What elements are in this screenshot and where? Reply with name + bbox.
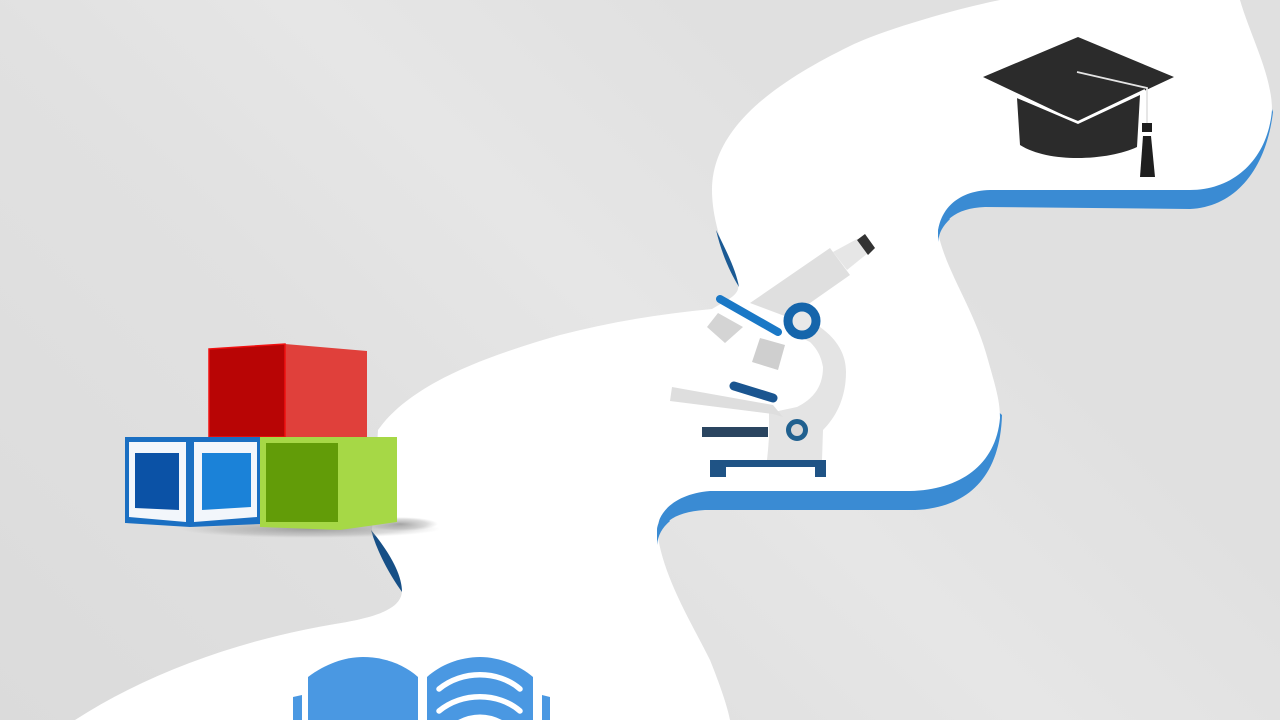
dark specimen slide	[734, 386, 773, 398]
book covers	[293, 695, 550, 720]
cap body	[1017, 95, 1140, 158]
small focus ring	[788, 422, 806, 438]
tassel	[1140, 123, 1155, 177]
blue band tip: lower	[657, 516, 670, 545]
block shadow	[180, 517, 440, 538]
sliver: upper dark blue edge	[716, 230, 739, 287]
blue block	[125, 437, 261, 527]
book right page	[427, 657, 533, 720]
red block	[209, 344, 367, 437]
green block	[260, 437, 397, 530]
book lines	[439, 675, 520, 720]
icon: open book	[293, 657, 550, 720]
book left page	[308, 657, 418, 720]
microscope arm	[767, 327, 846, 460]
objective lens right	[752, 338, 785, 370]
tassel cord	[1077, 72, 1147, 123]
blue focus ring	[788, 307, 816, 335]
microscope tube	[750, 248, 850, 318]
blue band tip: upper	[938, 216, 950, 242]
blue slide bar	[720, 299, 778, 332]
blue band: lower	[657, 400, 1002, 545]
icon: graduation cap	[983, 37, 1174, 177]
dark platform	[702, 427, 768, 437]
mortarboard	[983, 37, 1174, 122]
eyepiece cap	[857, 234, 875, 255]
microscope base	[710, 460, 826, 477]
sliver: lower dark blue edge	[371, 530, 402, 592]
blue band: upper	[938, 80, 1273, 242]
icon: microscope	[670, 234, 875, 477]
white cap edge	[1017, 90, 1145, 122]
icon: building blocks	[125, 344, 440, 538]
microscope stage	[670, 387, 783, 417]
microscope eyepiece	[833, 239, 868, 270]
objective lens left	[707, 313, 743, 343]
